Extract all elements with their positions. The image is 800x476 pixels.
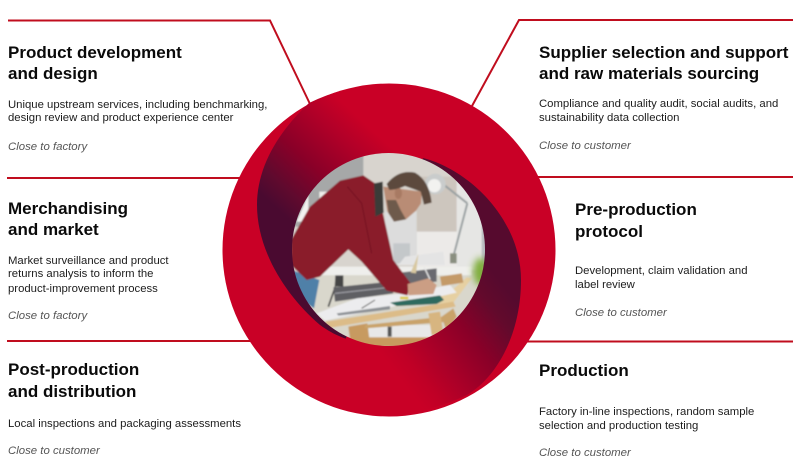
swirl ring graphic [222, 84, 556, 416]
connector line: merchandising [7, 177, 240, 179]
text block: supplier selection: Close to customer [539, 140, 632, 152]
connector line: supplier selection [472, 20, 793, 106]
text block: post-production and distribution: and distribution [8, 382, 136, 401]
text block: merchandising and market: Merchandising [8, 199, 128, 218]
text block: pre-production protocol: protocol [575, 222, 643, 241]
connector line: post-production [7, 340, 255, 342]
table [317, 254, 472, 347]
left dark crescent [257, 85, 430, 343]
text block: production: Close to customer [539, 447, 632, 459]
text block: merchandising and market: and market [8, 220, 99, 239]
text block: post-production and distribution: Post-production [8, 360, 139, 379]
outer red disc [222, 84, 556, 416]
text block: product development and design: Close to factory [8, 141, 88, 153]
text block: pre-production protocol: Close to customer [575, 307, 668, 319]
text block: merchandising and market: Close to factory [8, 310, 88, 322]
text block: supplier selection: and raw materials sourcing [539, 64, 759, 83]
text block: merchandising and market [8, 199, 169, 322]
text block: merchandising and market: Market surveillance and product [8, 255, 169, 267]
text block: merchandising and market: returns analysis to inform the [8, 268, 153, 280]
text block: supplier selection: sustainability data collection [539, 112, 679, 124]
text block: merchandising and market: product-improvement process [8, 283, 158, 295]
connector line: pre-production [535, 176, 793, 178]
text block: product development and design: and design [8, 64, 98, 83]
text block: pre-production protocol: Development, claim validation and [575, 265, 748, 277]
text block: production: Production [539, 361, 629, 380]
text block: supplier selection: Compliance and quality audit, social audits, and [539, 98, 778, 110]
text block: production: Factory in-line inspections, random sample [539, 406, 754, 418]
text block: supplier selection: Supplier selection and support [539, 43, 789, 62]
text block: product development and design: design review and product experience center [8, 112, 234, 124]
green plant [473, 258, 488, 286]
connector line: production [525, 340, 793, 342]
connector line: product development [8, 20, 310, 104]
text block: pre-production protocol: label review [575, 279, 636, 291]
man [291, 172, 437, 308]
text block: post-production and distribution [8, 360, 241, 457]
text block: pre-production protocol [575, 200, 748, 319]
text block: production [539, 361, 754, 459]
right dark crescent [345, 158, 521, 416]
text block: product development and design: Product development [8, 43, 182, 62]
text block: product development and design: Unique upstream services, including benchmarking, [8, 99, 267, 111]
photo: designer at drafting table [290, 150, 490, 350]
text block: product development and design [8, 43, 267, 153]
text block: post-production and distribution: Close to customer [8, 445, 101, 457]
text block: production: selection and production testing [539, 420, 698, 432]
text block: pre-production protocol: Pre-production [575, 200, 697, 219]
desk lamp [425, 174, 467, 263]
text block: post-production and distribution: Local inspections and packaging assessments [8, 418, 241, 430]
text block: supplier selection [539, 43, 789, 152]
